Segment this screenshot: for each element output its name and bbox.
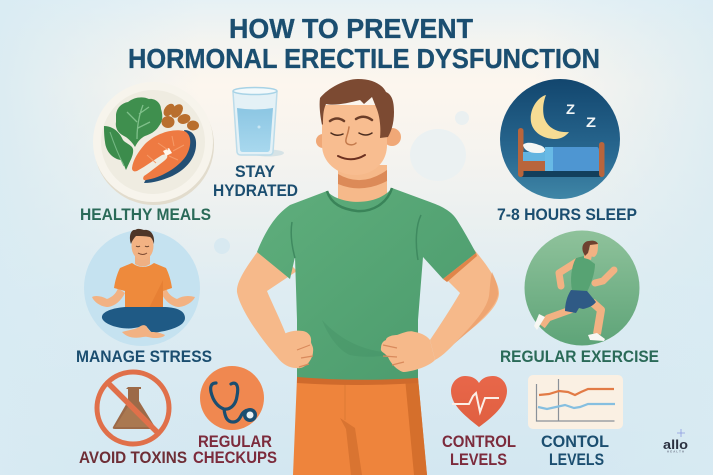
icon: glass of water [233,88,284,156]
icon: healthy meal plate [93,82,214,205]
neck [338,165,387,212]
label: contol levels (chart): CONTOL [541,432,609,451]
trousers [293,378,427,475]
icon: sleep moon and bed: Z [566,101,575,117]
icon: meditating man [84,229,200,346]
icon: sleep moon and bed: Z [586,114,597,130]
label: regular checkups: CHECKUPS [193,448,277,467]
icon: stethoscope [200,366,264,430]
label: regular checkups [193,432,277,467]
label: contol levels (chart): LEVELS [549,450,604,469]
label: stay hydrated: HYDRATED [213,181,298,200]
label: control levels (heart) [442,432,516,469]
label: healthy meals: HEALTHY MEALS [80,205,211,224]
label: stay hydrated [213,162,298,200]
label: contol levels (chart) [541,432,609,469]
central man figure [237,79,499,475]
logo: allo health [663,429,688,454]
title: HORMONAL ERECTILE DYSFUNCTION [128,43,600,74]
label: control levels (heart): CONTROL [442,432,516,451]
icon: no toxins flask [97,372,169,444]
icon: runner [524,230,640,346]
head [316,79,401,175]
logo: allo health: allo [663,437,688,452]
icon: heart with pulse [451,376,507,427]
label: control levels (heart): LEVELS [450,450,507,469]
label: manage stress: MANAGE STRESS [76,347,212,366]
label: regular exercise: REGULAR EXERCISE [500,347,659,366]
left arm [237,240,297,357]
title: HOW TO PREVENT [229,13,473,44]
label: avoid toxins: AVOID TOXINS [79,448,187,467]
icon: sleep moon and bed [500,79,620,199]
right arm [430,240,499,360]
icon: line chart [528,375,623,429]
hands [277,331,435,372]
green t-shirt [257,188,476,381]
title [128,13,600,74]
label: sleep hours: 7-8 HOURS SLEEP [497,205,637,224]
label: regular checkups: REGULAR [198,432,272,451]
logo: allo health: HEALTH [667,450,684,454]
label: stay hydrated: STAY [235,162,276,181]
